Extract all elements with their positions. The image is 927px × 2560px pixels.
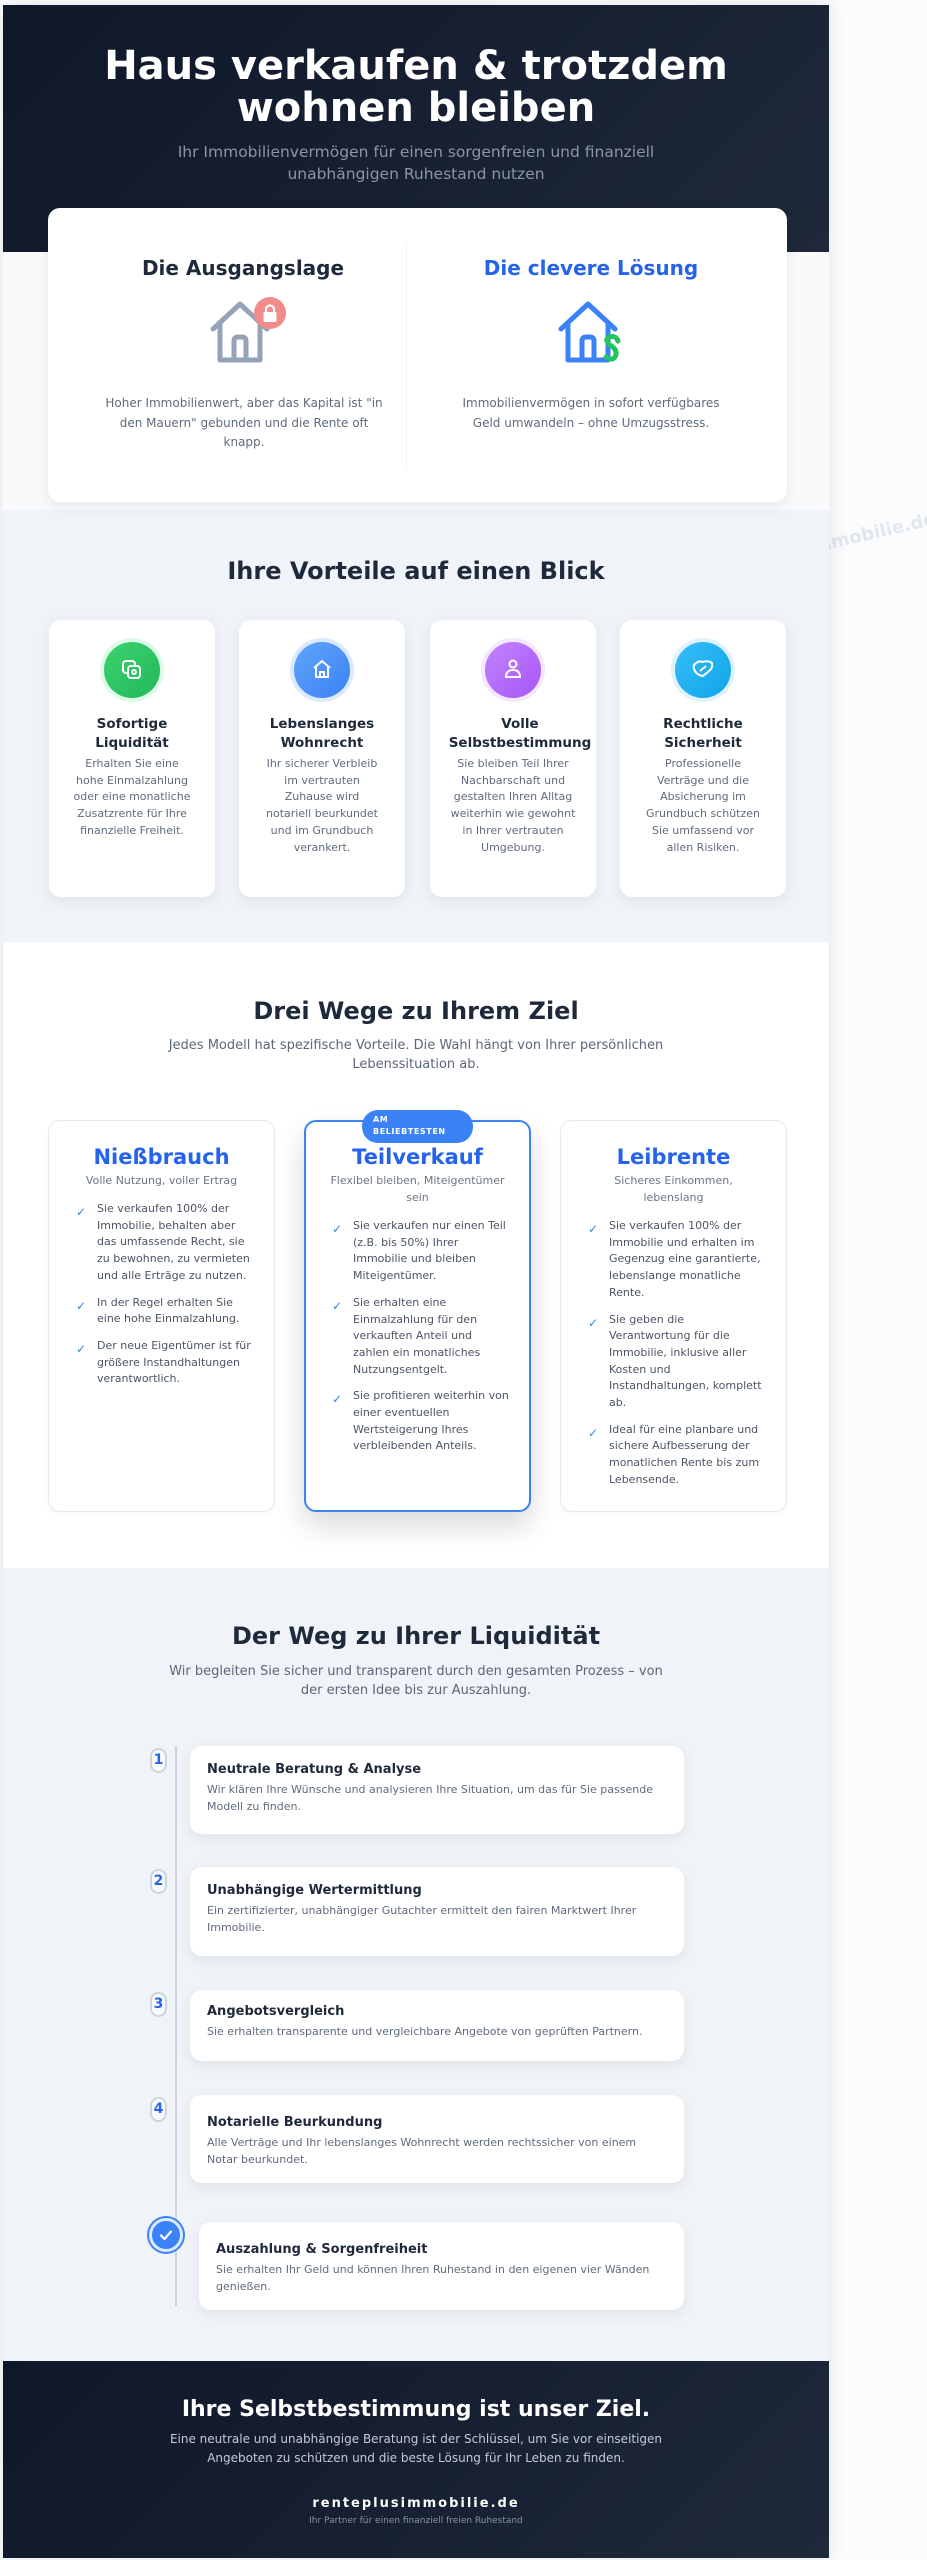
subtitle: Volle Nutzung, voller Ertrag: [86, 1174, 237, 1187]
card 2: [190, 1867, 684, 1956]
card 3: Angebotsvergleich: [207, 2004, 344, 2019]
title: Volle: [501, 716, 539, 732]
panel: Nießbrauch: [48, 1120, 275, 1512]
number 3: 3: [154, 1996, 163, 2012]
text: Ausgangslage: Hoher Immobilienwert, aber das Kapital ist "in den Mauern" gebunden und die Rente oft knapp.: [105, 396, 383, 449]
icon: person: [481, 638, 545, 702]
subtitle: Sicheres Einkommen, lebenslang: [614, 1174, 733, 1204]
list: Sie profitieren weiterhin von einer eventuellen Wertsteigerung Ihres verbleibenden Anteils.: [353, 1389, 509, 1452]
panel: Vorteil 1: [49, 620, 215, 897]
badge: am beliebtesten: [362, 1110, 473, 1143]
section background 2: [3, 510, 829, 942]
header: [3, 5, 829, 252]
number 1: 1: [154, 1752, 163, 1768]
panel: Teilverkauf (highlighted): [304, 1120, 531, 1512]
text: Professionelle Verträge und die Absicherung im Grundbuch schützen Sie umfassend vor allen Risiken.: [646, 757, 760, 854]
subtitle: Drei Wege: [168, 1038, 663, 1072]
heading: Ausgangslage: Die Ausgangslage: [142, 256, 344, 280]
list: Sie verkaufen 100% der Immobilie, behalten aber das umfassende Recht, sie zu bewohnen, zu vermieten und alle Erträge zu nutzen.: [97, 1202, 250, 1282]
panel: Vorteil 4: [620, 620, 786, 897]
heading: Vorteile: Ihre Vorteile auf einen Blick: [227, 557, 605, 585]
list: Ideal für eine planbare und sichere Aufbesserung der monatlichen Rente bis zum Lebensende.: [609, 1423, 759, 1486]
card 1: [190, 1746, 684, 1834]
panel: Vorteil 2: [239, 620, 405, 897]
icon: house with money: [558, 301, 620, 362]
list: In der Regel erhalten Sie eine hohe Einmalzahlung.: [97, 1296, 239, 1325]
step 5: [147, 2216, 685, 2315]
heading: Weg zur Liquidität: Der Weg zu Ihrer Liquidität: [232, 1622, 600, 1650]
title: wohnen bleiben: [237, 85, 595, 131]
heading: Lösung: Die clevere Lösung: [484, 256, 698, 280]
card 2: Unabhängige Wertermittlung: [207, 1883, 422, 1898]
footer text: Eine neutrale und unabhängige Beratung ist der Schlüssel, um Sie vor einseitigen: [170, 2432, 662, 2446]
card 5: [199, 2222, 684, 2310]
card 5: Auszahlung & Sorgenfreiheit: [216, 2242, 427, 2257]
section background 1: [3, 252, 829, 510]
number 2: [150, 1869, 167, 1894]
list: Sie verkaufen 100% der Immobilie und erhalten im Gegenzug eine garantierte, lebenslange monatliche Rente.: [609, 1219, 760, 1299]
heading: Drei Wege: Drei Wege zu Ihrem Ziel: [253, 997, 579, 1025]
title: [95, 716, 169, 751]
text: Lösung: Immobilienvermögen in sofort verfügbares Geld umwandeln – ohne Umzugsstress.: [462, 396, 720, 430]
card 1: Wir klären Ihre Wünsche und analysieren Ihre Situation, um das für Sie passende Modell zu finden.: [207, 1783, 653, 1813]
card 4: [190, 2095, 684, 2183]
list: [78, 1202, 251, 1385]
step 1: [150, 1746, 685, 1839]
card 5: Sie erhalten Ihr Geld und können Ihren Ruhestand in den eigenen vier Wänden genießen.: [216, 2263, 649, 2293]
title: Sofortige: [97, 716, 167, 732]
title: Teilverkauf: [352, 1145, 483, 1169]
step 4: [150, 2095, 685, 2188]
text: Sie bleiben Teil Ihrer Nachbarschaft und gestalten Ihren Alltag weiterhin wie gewohnt in Ihrer vertrauten Umgebung.: [451, 757, 575, 854]
title: [663, 716, 743, 751]
subtitle: Flexibel bleiben, Miteigentümer sein: [330, 1174, 505, 1204]
title: Leibrente: [617, 1145, 730, 1169]
number 2: 2: [154, 1873, 163, 1889]
panel: situation vs solution: [48, 208, 787, 502]
timeline: [147, 1746, 685, 2315]
card 4: Notarielle Beurkundung: [207, 2115, 382, 2130]
footer text: Angeboten zu schützen und die beste Lösung für Ihr Leben zu finden.: [207, 2451, 625, 2465]
title: Lebenslanges: [270, 716, 374, 732]
subtitle: Weg: der ersten Idee bis zur Auszahlung.: [301, 1683, 531, 1698]
step 2: [150, 1867, 685, 1961]
subtitle: Ihr Immobilienvermögen für einen sorgenfreien und finanziell: [178, 143, 654, 161]
list: [334, 1219, 509, 1452]
subtitle: unabhängigen Ruhestand nutzen: [287, 165, 545, 183]
list: Der neue Eigentümer ist für größere Instandhaltungen verantwortlich.: [97, 1339, 251, 1385]
card 3: [190, 1990, 684, 2061]
title: Sicherheit: [664, 735, 742, 751]
panel: Leibrente: [560, 1120, 787, 1512]
subtitle: Drei Wege: Jedes Modell hat spezifische Vorteile. Die Wahl hängt von Ihrer persönlichen: [169, 1038, 663, 1053]
number 4: 4: [154, 2101, 163, 2117]
icon: house: [290, 638, 354, 702]
list: Sie erhalten eine Einmalzahlung für den verkauften Anteil und zahlen ein monatliches Nutzungsentgelt.: [353, 1296, 480, 1376]
icon: handshake: [671, 638, 735, 702]
icon: money: [100, 638, 164, 702]
card 2: Ein zertifizierter, unabhängiger Gutachter ermittelt den fairen Marktwert Ihrer Immobilie.: [207, 1904, 636, 1934]
step 3: [150, 1990, 685, 2066]
number 4: [150, 2097, 167, 2122]
title: [104, 43, 728, 131]
panel: Vorteil 3: [430, 620, 596, 897]
footer text: [170, 2432, 662, 2465]
card 4: Alle Verträge und Ihr lebenslanges Wohnrecht werden rechtssicher von einem Notar beurkundet.: [207, 2136, 636, 2166]
title: [270, 716, 374, 751]
title: Wohnrecht: [281, 735, 363, 751]
icon: check: [149, 2218, 183, 2252]
title: Nießbrauch: [93, 1145, 230, 1169]
badge: am beliebtesten: BELIEBTESTEN: [373, 1127, 446, 1136]
icon: locked house: [210, 297, 286, 362]
list: Sie geben die Verantwortung für die Immobilie, inklusive aller Kosten und Instandhaltungen, komplett ab.: [609, 1313, 762, 1409]
card 3: Sie erhalten transparente und vergleichbare Angebote von geprüften Partnern.: [207, 2025, 642, 2038]
subtitle: Weg: Wir begleiten Sie sicher und transparent durch den gesamten Prozess – von: [169, 1664, 663, 1679]
title: Selbstbestimmung: [449, 735, 591, 751]
title: Rechtliche: [663, 716, 743, 732]
title: Haus verkaufen & trotzdem: [104, 43, 728, 89]
card 1: Neutrale Beratung & Analyse: [207, 1762, 421, 1777]
number 1: [150, 1748, 167, 1773]
title: [449, 716, 591, 751]
subtitle: [178, 143, 654, 183]
badge: am beliebtesten: AM: [373, 1115, 388, 1124]
footer: [3, 2361, 829, 2558]
number 3: [150, 1992, 167, 2017]
subtitle: Drei Wege: Lebenssituation ab.: [352, 1057, 480, 1072]
list: [590, 1219, 762, 1486]
text: Erhalten Sie eine hohe Einmalzahlung oder eine monatliche Zusatzrente für Ihre finanzielle Freiheit.: [74, 757, 190, 837]
footer heading: Ihre Selbstbestimmung ist unser Ziel.: [182, 2397, 650, 2422]
list: Sie verkaufen nur einen Teil (z.B. bis 50%) Ihrer Immobilie und bleiben Miteigentümer.: [353, 1219, 506, 1282]
subtitle: Weg: [169, 1664, 663, 1698]
text: Ihr sicherer Verbleib im vertrauten Zuhause wird notariell beurkundet und im Grundbuch verankert.: [266, 757, 378, 854]
title: Liquidität: [95, 735, 169, 751]
domain: renteplusimmobilie.de: [312, 2496, 520, 2511]
section background 4: [3, 1568, 829, 2361]
tagline: Ihr Partner für einen finanziell freien Ruhestand: [309, 2516, 523, 2526]
